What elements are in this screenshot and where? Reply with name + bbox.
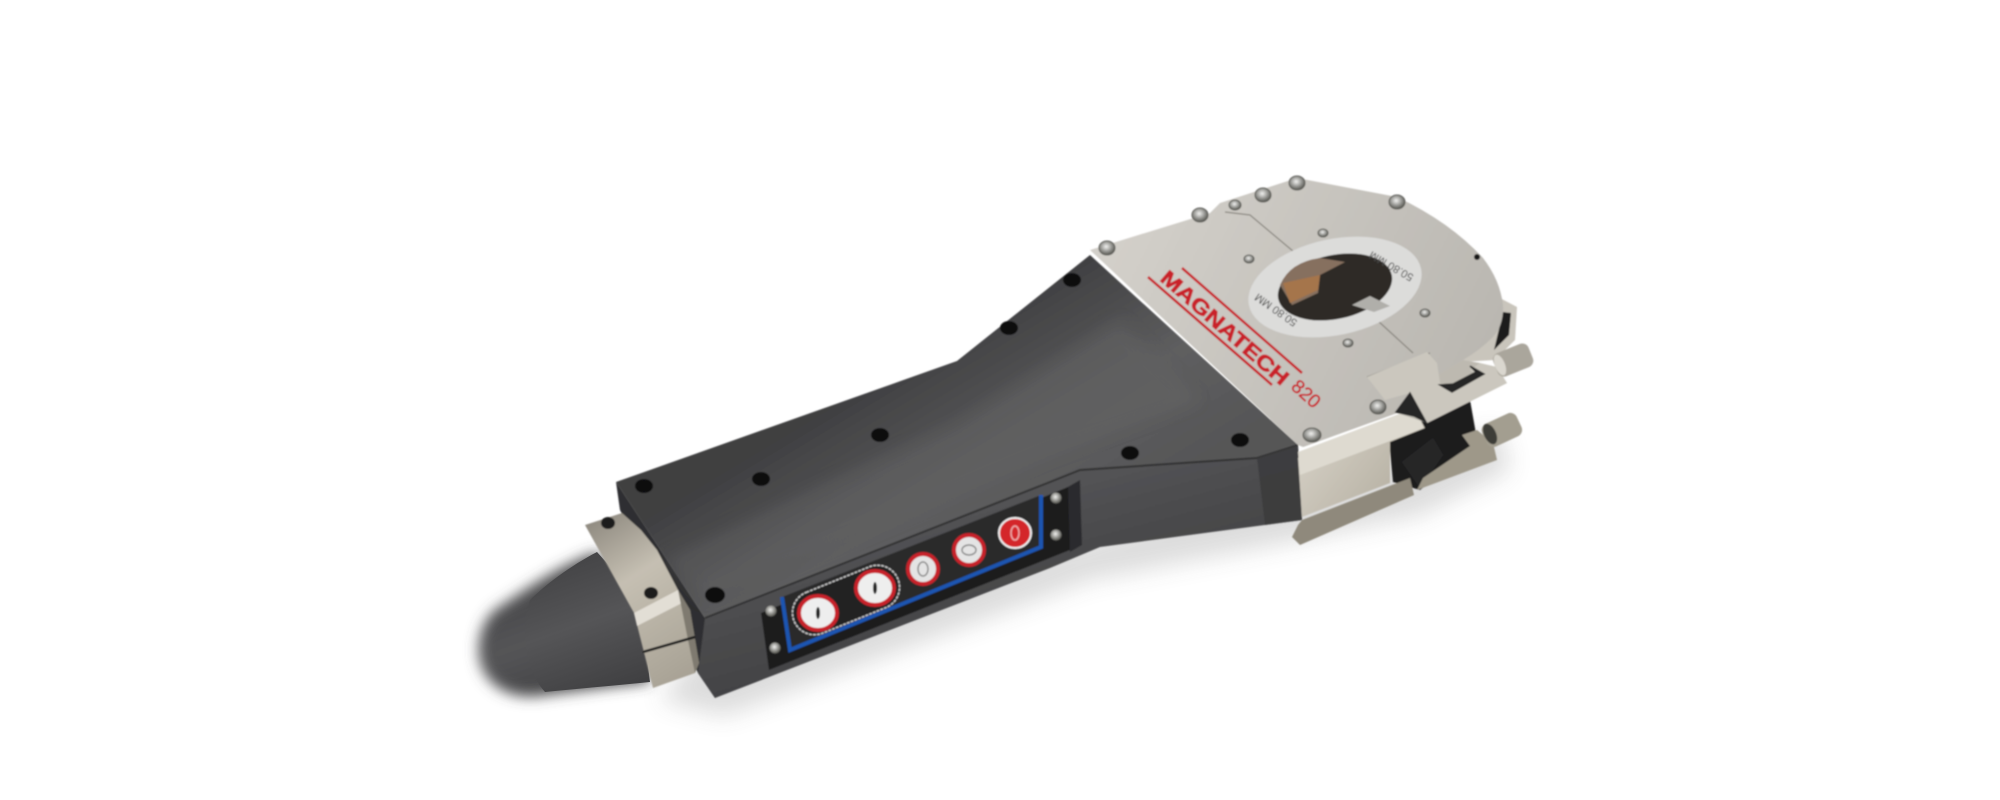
plate: main outline: [1090, 178, 1503, 447]
button: wire: [954, 535, 984, 565]
clamp: lit top lip: [1298, 408, 1424, 475]
plate: right side band: [1460, 297, 1517, 362]
body: front side face: [698, 445, 1302, 698]
body: shoulder edge line: [705, 445, 1298, 618]
logo: model number: 820: [1287, 376, 1324, 413]
power cable: [479, 552, 650, 696]
latch: dark slots: [1396, 366, 1484, 422]
clamp: dark cavity: [1388, 400, 1478, 490]
knob: upper: [1491, 341, 1535, 379]
clamp: black tab: [1402, 438, 1443, 488]
clamp: lower rail: [1292, 478, 1414, 545]
body: top face: [616, 255, 1298, 618]
panel: blue outline: [782, 495, 1041, 650]
panel: black backing plate: [761, 487, 1070, 670]
clamp: lower latch: [1417, 430, 1497, 490]
lower clamp hardware: [1292, 400, 1524, 545]
logo: red rule top: [1182, 268, 1302, 373]
ring size label: top: 50.80 MM: [1367, 248, 1416, 283]
plate: dark pin: [1474, 254, 1480, 260]
end clamp block at the cable: [585, 513, 699, 688]
panel: inner membrane: [782, 495, 1041, 650]
plate: center opening: [1272, 244, 1398, 330]
plate: seams: [1225, 212, 1430, 377]
button: jog right: [856, 571, 894, 605]
knob: lower: [1479, 411, 1524, 449]
control panel: [761, 487, 1070, 670]
panel: pill around jog buttons: [786, 559, 906, 641]
body: highlight band along handle: [666, 320, 1198, 600]
ring size label: bottom: 50.80 MM: [1253, 291, 1300, 328]
panel: corner screws: [766, 492, 1062, 654]
plate: screws: [1099, 176, 1430, 442]
body: mounting holes: [635, 273, 1249, 603]
logo: MAGNATECH: MAGNATECH: [1156, 266, 1293, 390]
drop shadow under the tool: [660, 430, 1510, 716]
plate: underlay behind latch: [1303, 360, 1507, 447]
clamp: silver side plate: [1298, 413, 1425, 517]
button: jog left: [799, 596, 837, 630]
plate: bearing ring: [1239, 222, 1431, 352]
dark body of the weld head: [616, 255, 1302, 698]
button: stop: [999, 518, 1031, 548]
body: chamfer facet near plate: [1257, 445, 1302, 525]
logo: red rule bottom: [1148, 277, 1272, 385]
button: gas: [908, 554, 938, 584]
upper latch: [1367, 341, 1535, 423]
latch: body: [1367, 352, 1507, 423]
body: rear end face behind clamp: [616, 482, 715, 698]
steel head plate: [1090, 176, 1517, 447]
body: step behind panel: [1066, 480, 1082, 552]
